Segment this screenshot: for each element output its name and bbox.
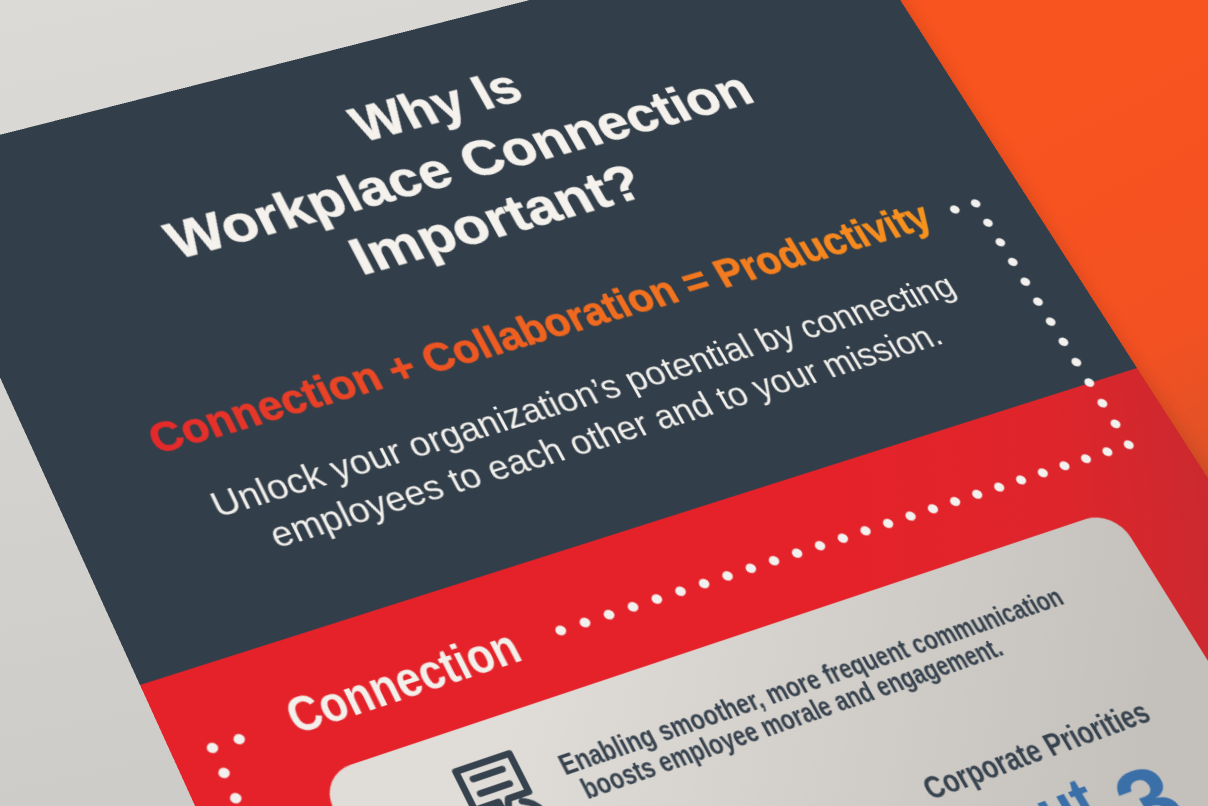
dotted border right — [414, 203, 1129, 633]
intro text: employees to each other and to your mission. — [249, 323, 970, 526]
title: Why Is — [353, 61, 556, 157]
dotted border left — [213, 739, 428, 806]
card text: boosts employee morale and engagement. — [532, 614, 973, 740]
panel: dark header — [0, 0, 1137, 685]
intro text: Unlock your organization’s potential by connecting — [194, 276, 994, 499]
title — [126, 7, 796, 330]
title: Workplace Connection — [156, 65, 809, 268]
card text: Enabling smoother, more frequent communication — [513, 572, 1045, 720]
icon: chat document — [456, 751, 550, 806]
section heading: Connection — [255, 585, 497, 682]
stat: about 3 — [987, 739, 1204, 806]
stat heading: Corporate Priorities — [862, 671, 1111, 755]
title: Important? — [342, 160, 676, 286]
tagline: Connection + Collaboration = Productivity — [136, 205, 983, 444]
panel: card — [318, 510, 1208, 806]
panel: red connection section — [45, 190, 1208, 806]
